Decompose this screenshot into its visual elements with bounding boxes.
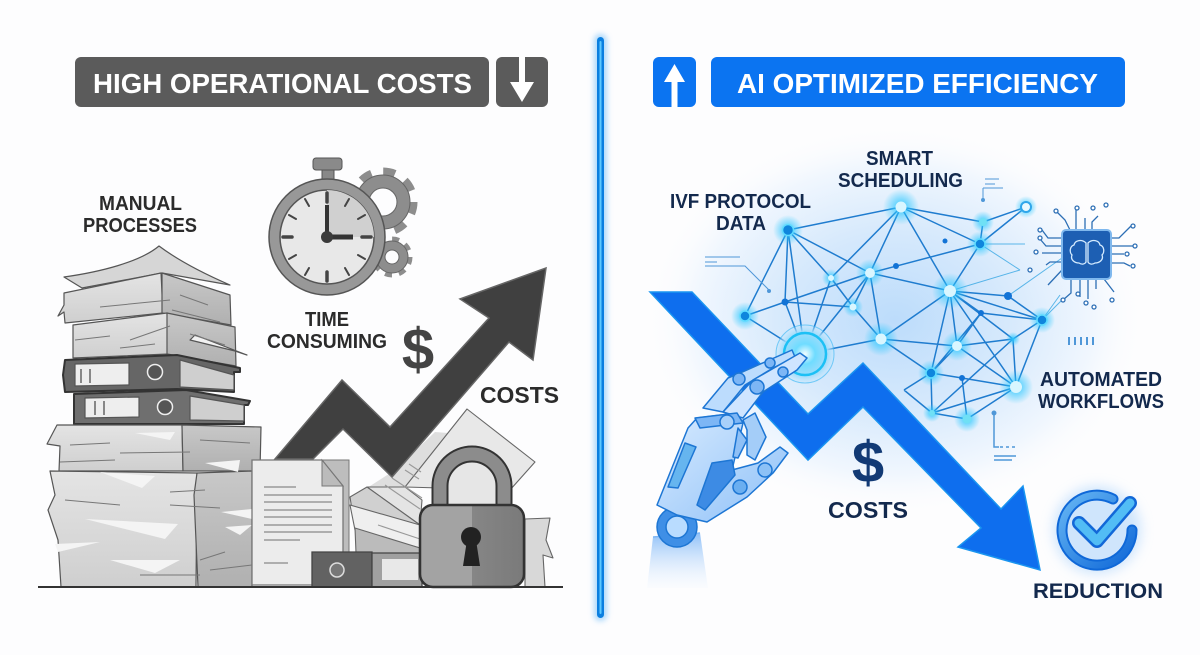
illustration: background papers: [350, 409, 553, 587]
heading: high operational costs: HIGH OPERATIONAL COSTS: [93, 68, 472, 99]
label: costs: COSTS: [828, 497, 908, 523]
label: manual processes: PROCESSES: [83, 215, 197, 237]
floor line: [38, 586, 563, 588]
label: manual processes: MANUAL: [99, 193, 182, 215]
label: IVF protocol data: [670, 191, 811, 235]
icon: stopwatch: [269, 158, 385, 295]
label: manual processes: [83, 193, 197, 237]
heading: high operational costs: [75, 57, 489, 107]
illustration: small binder: [312, 552, 422, 587]
central divider: [594, 34, 607, 621]
label: smart scheduling: [838, 148, 963, 192]
icon: down arrow: [496, 57, 548, 107]
label: costs: COSTS: [480, 382, 559, 408]
illustration: document: [252, 460, 349, 585]
network nodes: [731, 189, 1055, 432]
background glow: [645, 125, 1145, 515]
label: time consuming: CONSUMING: [267, 331, 387, 353]
heading: AI optimized efficiency: AI OPTIMIZED EFFICIENCY: [737, 68, 1098, 99]
label: automated workflows: AUTOMATED: [1040, 369, 1162, 391]
label: smart scheduling: SCHEDULING: [838, 170, 963, 192]
label: time consuming: TIME: [305, 309, 349, 331]
panel: AI optimized efficiency: [645, 57, 1164, 603]
decorative data marks: [705, 179, 1093, 460]
label: smart scheduling: SMART: [866, 148, 933, 170]
heading: AI optimized efficiency: [711, 57, 1125, 107]
icon: up arrow: [653, 57, 696, 107]
label: IVF protocol data: DATA: [716, 213, 766, 235]
illustration: paper stack and binders: [47, 246, 261, 587]
icon: AI chip: [1028, 203, 1137, 309]
label: automated workflows: WORKFLOWS: [1038, 391, 1164, 413]
icon: check badge: [1053, 486, 1141, 574]
icon: padlock: [420, 454, 524, 587]
icon: touch point: [776, 325, 834, 383]
panel: high operational costs: [38, 57, 563, 587]
label: time consuming: [267, 309, 387, 353]
label: reduction: REDUCTION: [1033, 580, 1163, 603]
label: IVF protocol data: IVF PROTOCOL: [670, 191, 811, 213]
label: automated workflows: [1038, 369, 1164, 413]
arrow: rising costs: [275, 268, 546, 477]
chart: neural network: [731, 189, 1062, 432]
illustration: robot hand: [647, 350, 807, 588]
icon: dollar sign: $: [402, 317, 434, 382]
icon: dollar sign: $: [852, 430, 884, 495]
icon: gears: [353, 172, 413, 274]
arrow: falling costs: [650, 292, 1040, 570]
